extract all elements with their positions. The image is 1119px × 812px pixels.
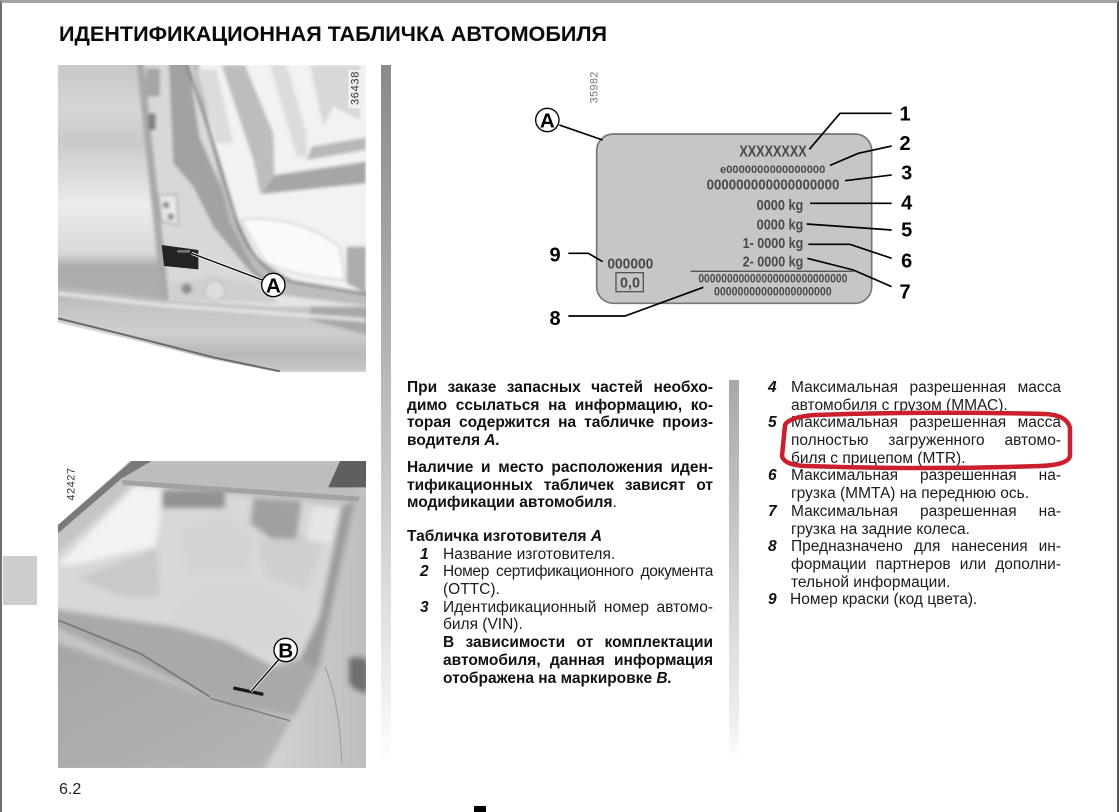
- illustration: windshield with marking B: [58, 461, 366, 768]
- intro text: водителя А.: [407, 432, 500, 449]
- intro text: димо ссылаться на информацию, ко-: [407, 397, 713, 414]
- text: 4: [768, 379, 777, 396]
- plate legend items 4-9: формации партнеров или дополни-: [791, 556, 1061, 573]
- callout numbers: 9: [549, 245, 561, 267]
- illustration: door pillar with plate A: 36438: [349, 72, 361, 105]
- callout numbers: 5: [901, 220, 912, 242]
- plate legend items 1-3: Табличка изготовителя А: [407, 528, 602, 545]
- intro text: торая содержится на табличке произ-: [407, 414, 713, 431]
- plate: e0000000000000000: [720, 164, 825, 176]
- plate legend items 4-9: полностью загруженного автомо-: [791, 432, 1061, 449]
- plate: 1- 0000 kg: [743, 236, 803, 252]
- plate diagram: [535, 72, 913, 330]
- callout numbers: 1: [899, 103, 911, 125]
- text: 9: [768, 591, 777, 608]
- availability note: модификации автомобиля.: [407, 494, 617, 511]
- callout numbers: [549, 103, 913, 330]
- crop mark: [474, 806, 486, 812]
- plate A marker: A: [266, 274, 281, 297]
- plate legend items 1-3: [407, 528, 713, 686]
- callout numbers: 2: [899, 133, 911, 155]
- plate legend items 1-3: Номер сертификационного документа: [443, 563, 713, 580]
- plate legend items 1-3: автомобиля, данная информация: [443, 652, 713, 669]
- marking B: B: [278, 639, 293, 662]
- intro text: [407, 379, 713, 449]
- callout numbers: 6: [901, 251, 912, 273]
- plate: 00000000000000000000000000: [698, 272, 848, 286]
- gradient column bar middle: [729, 380, 739, 762]
- callout A: [536, 108, 559, 132]
- plate: 0000 kg: [757, 217, 803, 233]
- leader lines: [559, 113, 892, 316]
- plate legend items 4-9: Предназначено для нанесения ин-: [791, 538, 1061, 555]
- callout numbers: 3: [901, 163, 912, 185]
- callout A: A: [540, 109, 555, 132]
- plate legend items 1-3: Название изготовителя.: [443, 546, 615, 563]
- plate legend items 4-9: Максимальная разрешенная на-: [791, 503, 1061, 520]
- text: 6: [768, 467, 777, 484]
- title: ИДЕНТИФИКАЦИОННАЯ ТАБЛИЧКА АВТОМОБИЛЯ: [59, 21, 607, 46]
- plate legend items 4-9: Максимальная разрешенная масса: [791, 379, 1061, 396]
- plate: 0000 kg: [757, 198, 803, 214]
- red highlight outline: [780, 410, 1072, 470]
- page number: 6.2: [59, 781, 81, 798]
- intro text: При заказе запасных частей необхо-: [407, 379, 713, 396]
- plate legend items 1-3: Идентификационный номер автомо-: [443, 599, 713, 616]
- illustration: windshield with marking B: 42427: [65, 468, 77, 501]
- plate legend items 4-9: Номер краски (код цвета).: [790, 591, 977, 608]
- illustration: door pillar with plate A: [58, 65, 366, 372]
- side tab: [3, 556, 37, 605]
- plate legend items 1-3: 1: [420, 546, 429, 563]
- plate: 00000000000000000000: [714, 284, 832, 298]
- plate A marker: [162, 245, 285, 297]
- gradient column bar left: [381, 65, 391, 762]
- plate legend items 4-9: автомобиля с грузом (ММАС).: [791, 397, 1008, 414]
- plate legend items 1-3: 3: [420, 599, 429, 616]
- callout numbers: 8: [549, 308, 561, 330]
- plate legend items 4-9: Максимальная разрешенная на-: [791, 467, 1061, 484]
- plate: 2- 0000 kg: [743, 255, 803, 271]
- plate: XXXXXXXX: [739, 144, 807, 161]
- plate legend items 4-9: биля с прицепом (MTR).: [791, 450, 966, 467]
- plate legend items 1-3: биля (VIN).: [443, 616, 523, 633]
- figure code: 35982: [588, 72, 600, 103]
- text: 7: [768, 503, 777, 520]
- plate legend items 1-3: 2: [420, 563, 429, 580]
- marking B: [233, 638, 297, 694]
- plate: 000000: [607, 256, 653, 272]
- plate legend items 4-9: тельной информации.: [791, 574, 950, 591]
- text: 8: [768, 538, 777, 555]
- callout numbers: 7: [899, 281, 911, 303]
- plate legend items 1-3: (ОТТС).: [443, 581, 500, 598]
- availability note: [407, 459, 713, 511]
- callout numbers: 4: [901, 193, 913, 215]
- plate legend items 4-9: грузка на задние колеса.: [791, 520, 970, 538]
- plate: 0,0: [620, 276, 640, 292]
- plate legend items 4-9: [768, 379, 1061, 608]
- availability note: тификационных табличек зависят от: [407, 477, 713, 494]
- plate legend items 4-9: грузка (ММТА) на переднюю ось.: [791, 485, 1029, 502]
- plate: 000000000000000000: [707, 177, 839, 193]
- availability note: Наличие и место расположения иден-: [407, 459, 713, 476]
- plate legend items 4-9: Максимальная разрешенная масса: [791, 414, 1061, 431]
- plate legend items 1-3: В зависимости от комплектации: [443, 634, 713, 651]
- text: 5: [768, 414, 777, 431]
- plate legend items 1-3: отображена на маркировке В.: [443, 670, 672, 686]
- plate: [597, 134, 872, 303]
